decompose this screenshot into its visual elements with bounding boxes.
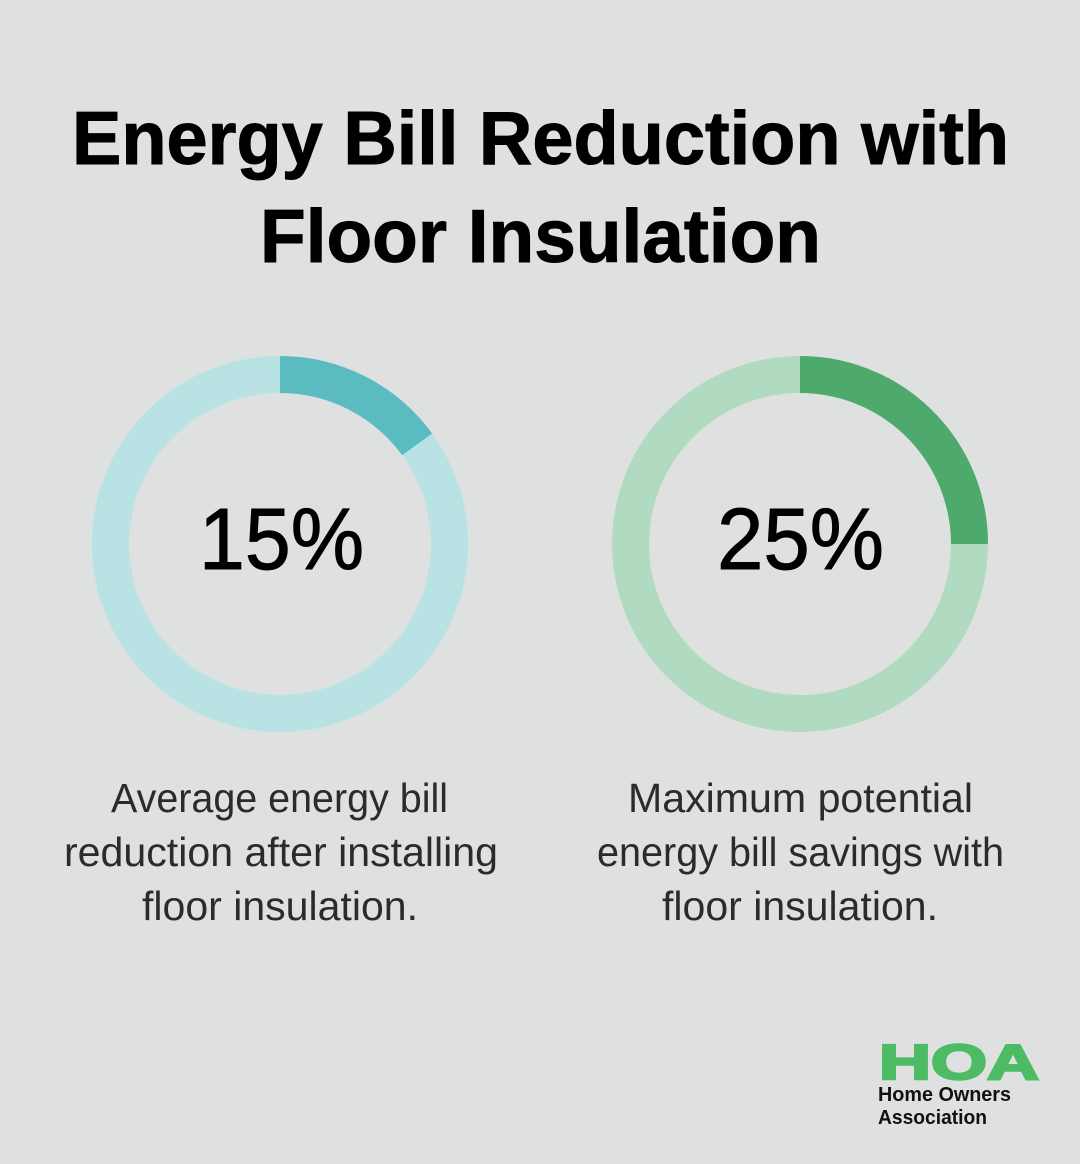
description: average reduction xyxy=(64,775,498,929)
donut chart: 25% xyxy=(630,374,970,714)
title xyxy=(72,96,1009,278)
description: average reduction: floor insulation. xyxy=(142,883,418,929)
description: average reduction: Average energy bill xyxy=(111,775,448,821)
panel: 15% average reduction xyxy=(64,374,498,929)
panel: 25% maximum savings xyxy=(597,374,1004,929)
stat: 15%: 15% xyxy=(199,491,364,588)
logo wordmark: HOA xyxy=(879,1036,1039,1090)
logo name: Association xyxy=(878,1107,987,1129)
logo name xyxy=(878,1084,1011,1129)
logo name: Home Owners xyxy=(878,1084,1011,1106)
description: maximum savings xyxy=(597,775,1004,929)
description: maximum savings: floor insulation. xyxy=(662,883,938,929)
description: maximum savings: Maximum potential xyxy=(628,775,973,821)
title: Energy Bill Reduction with xyxy=(72,96,1009,180)
stat: 25%: 25% xyxy=(717,491,884,588)
description: maximum savings: energy bill savings with xyxy=(597,829,1004,875)
donut chart: 15% xyxy=(110,374,450,714)
title: Floor Insulation xyxy=(260,194,821,278)
description: average reduction: reduction after installing xyxy=(64,829,498,875)
logo: HOA Home Owners Association xyxy=(878,1036,1039,1129)
